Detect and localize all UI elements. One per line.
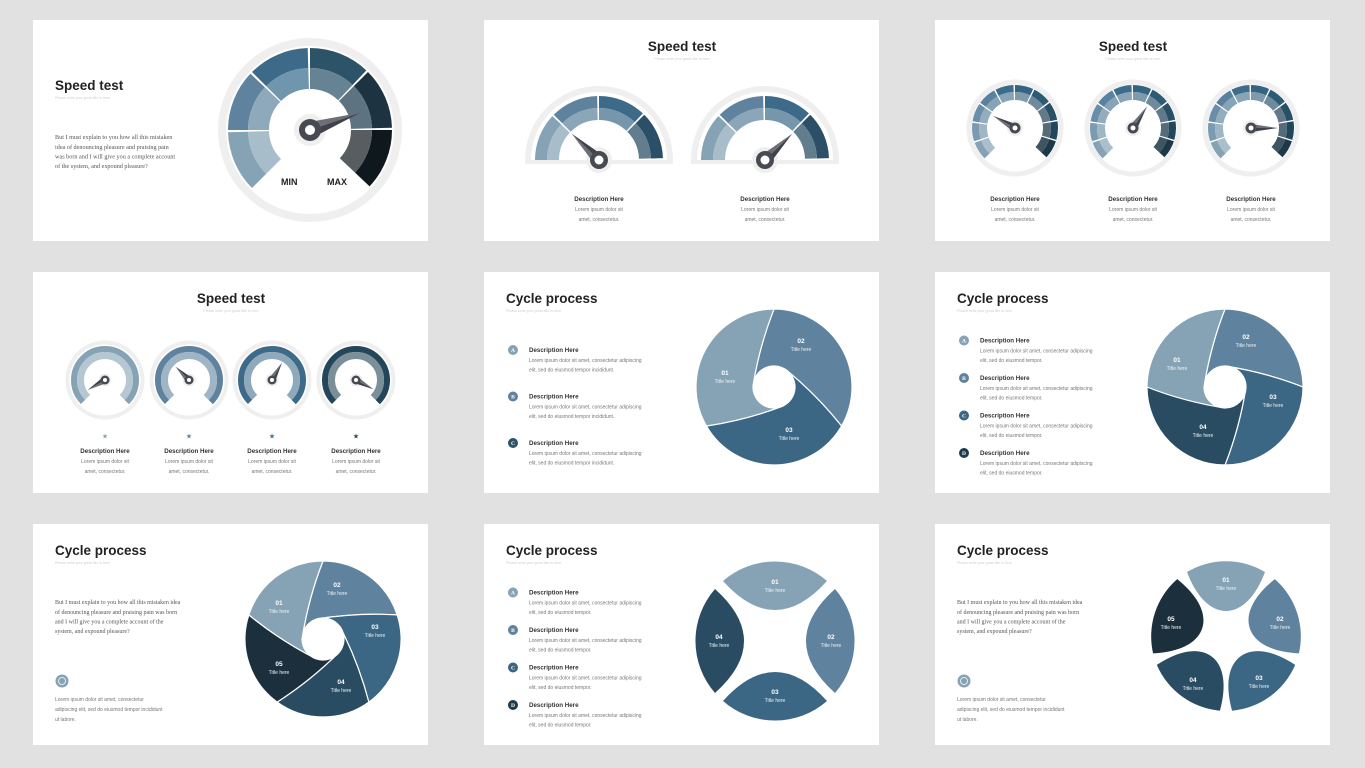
slide 6: cycle process 4 bbox=[935, 272, 1330, 493]
stars and descriptions bbox=[80, 432, 381, 475]
swirl chart 3: 02 bbox=[797, 338, 805, 345]
list: Lorem ipsum dolor sit amet, consectetur adipiscing bbox=[529, 451, 642, 457]
petal chart 5: Title here bbox=[1161, 625, 1182, 631]
slide 2: two half gauges bbox=[484, 20, 879, 242]
lorem text bbox=[957, 697, 1065, 723]
subtitle: Please write your great title is here bbox=[55, 96, 110, 100]
list: Description Here bbox=[980, 450, 1030, 457]
list: Lorem ipsum dolor sit amet, consectetur adipiscing bbox=[529, 404, 642, 410]
list: Description Here bbox=[529, 394, 579, 400]
swirl chart 3 bbox=[667, 300, 852, 494]
title: Cycle process bbox=[957, 543, 1049, 558]
list: elit, sed do eiusmod tempor. bbox=[529, 610, 592, 616]
gauge 3 bbox=[228, 336, 316, 424]
slide 4: four simple gauges bbox=[33, 272, 428, 493]
petal chart 4: Title here bbox=[821, 643, 842, 649]
list: elit, sed do eiusmod tempor. bbox=[529, 648, 592, 654]
slide 5: cycle process 3 bbox=[484, 272, 879, 494]
list: elit, sed do eiusmod tempor. bbox=[529, 685, 592, 691]
slide 8: cycle process 4 petals bbox=[484, 524, 879, 745]
lorem text: Lorem ipsum dolor sit amet, consectetur bbox=[55, 697, 144, 703]
paragraph: But I must explain to you how all this mistaken idea bbox=[957, 600, 1083, 606]
list: Description Here bbox=[529, 627, 579, 634]
description left: Lorem ipsum dolor sit bbox=[575, 207, 624, 213]
petal chart 5: Title here bbox=[1216, 586, 1237, 592]
list: Lorem ipsum dolor sit amet, consectetur adipiscing bbox=[980, 386, 1093, 392]
stars and descriptions: Lorem ipsum dolor sit bbox=[165, 459, 214, 465]
list: elit, sed do eiusmod tempor. bbox=[980, 358, 1043, 364]
list: elit, sed do eiusmod tempor. bbox=[980, 396, 1043, 402]
descriptions: amet, consectetur. bbox=[995, 217, 1035, 223]
swirl chart 5: 02 bbox=[333, 582, 341, 589]
swirl chart 5: Title here bbox=[327, 591, 348, 597]
swirl chart 4: Title here bbox=[1167, 366, 1188, 372]
stars and descriptions: ★ bbox=[186, 432, 192, 440]
petal chart 5: 01 bbox=[1222, 577, 1230, 584]
swirl chart 4 bbox=[1147, 309, 1303, 465]
paragraph bbox=[55, 600, 181, 635]
list: elit, sed do eiusmod tempor. bbox=[980, 470, 1043, 476]
gauge 2 bbox=[145, 336, 233, 424]
subtitle: Please write your great title is here bbox=[1105, 57, 1161, 61]
gauge 1 bbox=[61, 336, 149, 424]
list: elit, sed do eiusmod tempor. bbox=[980, 433, 1043, 439]
petal chart 5 bbox=[1143, 561, 1309, 719]
list: Description Here bbox=[529, 440, 579, 447]
lorem text: adipiscing elit, sed do eiusmod tempor incididunt bbox=[55, 707, 163, 713]
list: A bbox=[511, 348, 515, 354]
list: Description Here bbox=[980, 375, 1030, 382]
list: C bbox=[511, 666, 515, 672]
gauge 3 bbox=[1195, 72, 1307, 184]
petal chart 4: Title here bbox=[765, 698, 786, 704]
descriptions: Description Here bbox=[1108, 196, 1158, 203]
list: D bbox=[511, 703, 515, 709]
icon: info circle bbox=[56, 674, 68, 688]
petal chart 5: Title here bbox=[1270, 625, 1291, 631]
petal chart 4: 02 bbox=[827, 634, 835, 641]
descriptions: Lorem ipsum dolor sit bbox=[1227, 207, 1276, 213]
gauge: large bbox=[208, 28, 412, 232]
swirl chart 5 bbox=[217, 544, 420, 746]
title: Speed test bbox=[1099, 39, 1168, 54]
list: elit, sed do eiusmod tempor. bbox=[529, 722, 592, 728]
title: Cycle process bbox=[506, 543, 598, 558]
stars and descriptions: amet, consectetur. bbox=[85, 469, 125, 475]
slide 9: cycle process 5 petals bbox=[935, 524, 1330, 745]
gauge: large: MAX bbox=[327, 177, 347, 187]
paragraph: idea of denouncing pleasure and praising pain bbox=[55, 144, 169, 151]
petal chart 5: 02 bbox=[1276, 616, 1284, 623]
description left bbox=[574, 196, 624, 223]
petal chart 4: 04 bbox=[715, 634, 723, 641]
list: Description Here bbox=[529, 590, 579, 596]
swirl chart 3: 03 bbox=[785, 427, 793, 434]
list: Lorem ipsum dolor sit amet, consectetur adipiscing bbox=[980, 461, 1093, 467]
swirl chart 5: 04 bbox=[337, 679, 345, 686]
list: A bbox=[962, 338, 966, 344]
description right: Description Here bbox=[740, 196, 790, 203]
stars and descriptions: amet, consectetur. bbox=[336, 469, 376, 475]
swirl chart 5: Title here bbox=[269, 609, 290, 615]
swirl chart 3: Title here bbox=[715, 379, 736, 385]
swirl chart 4: 01 bbox=[1173, 357, 1181, 364]
paragraph: system, and expound pleasure? bbox=[55, 629, 130, 635]
list bbox=[508, 588, 642, 728]
swirl chart 3: Title here bbox=[779, 436, 800, 442]
description left: amet, consectetur. bbox=[579, 217, 619, 223]
description right: Lorem ipsum dolor sit bbox=[741, 207, 790, 213]
gauge: large: MIN bbox=[281, 177, 298, 187]
list: Lorem ipsum dolor sit amet, consectetur adipiscing bbox=[529, 600, 642, 606]
stars and descriptions: ★ bbox=[102, 432, 108, 440]
list: C bbox=[511, 441, 515, 447]
paragraph: system, and expound pleasure? bbox=[957, 629, 1032, 635]
swirl chart 4: Title here bbox=[1193, 433, 1214, 439]
descriptions: Description Here bbox=[1226, 196, 1276, 203]
swirl chart 4: 03 bbox=[1269, 394, 1277, 401]
descriptions: amet, consectetur. bbox=[1231, 217, 1271, 223]
stars and descriptions: ★ bbox=[353, 432, 359, 440]
stars and descriptions: Description Here bbox=[80, 448, 130, 455]
slide 3: three segmented gauges bbox=[935, 20, 1330, 241]
lorem text: adipiscing elit, sed do eiusmod tempor incididunt bbox=[957, 707, 1065, 713]
paragraph: of denouncing pleasure and praising pain was born bbox=[55, 609, 177, 616]
list: elit, sed do eiusmod tempor incididunt. bbox=[529, 368, 614, 374]
swirl chart 5: 01 bbox=[275, 600, 283, 607]
petal chart 5: Title here bbox=[1249, 684, 1270, 690]
swirl chart 5: Title here bbox=[365, 633, 386, 639]
swirl chart 5: 05 bbox=[275, 661, 283, 668]
subtitle: Please write your great title is here bbox=[654, 57, 710, 61]
list: D bbox=[962, 451, 966, 457]
title: Speed test bbox=[648, 39, 717, 54]
stars and descriptions: Lorem ipsum dolor sit bbox=[332, 459, 381, 465]
subtitle: Please write your great title is here bbox=[957, 309, 1012, 313]
descriptions: Description Here bbox=[990, 196, 1040, 203]
petal chart 5: 05 bbox=[1167, 616, 1175, 623]
swirl chart 5: 03 bbox=[371, 624, 379, 631]
stars and descriptions: Description Here bbox=[164, 448, 214, 455]
description left: Description Here bbox=[574, 196, 624, 203]
list bbox=[959, 336, 1093, 476]
list: B bbox=[962, 376, 966, 382]
paragraph: and I will give you a complete account of the bbox=[55, 618, 164, 626]
stars and descriptions: Lorem ipsum dolor sit bbox=[81, 459, 130, 465]
paragraph bbox=[55, 134, 175, 170]
descriptions: amet, consectetur. bbox=[1113, 217, 1153, 223]
petal chart 5: 04 bbox=[1189, 677, 1197, 684]
list: Description Here bbox=[980, 412, 1030, 420]
gauge 1 bbox=[959, 72, 1071, 184]
list: Lorem ipsum dolor sit amet, consectetur adipiscing bbox=[980, 348, 1093, 354]
lorem text: ut labore. bbox=[55, 717, 76, 723]
swirl chart 5: Title here bbox=[331, 688, 352, 694]
stars and descriptions: Description Here bbox=[331, 448, 381, 455]
title: Speed test bbox=[55, 78, 124, 93]
gauge: half left bbox=[517, 78, 681, 242]
gauge: half right bbox=[683, 78, 847, 242]
list: Description Here bbox=[529, 664, 579, 672]
list: Lorem ipsum dolor sit amet, consectetur adipiscing bbox=[980, 424, 1093, 430]
petal chart 4 bbox=[695, 561, 855, 721]
gauge 4 bbox=[312, 336, 400, 424]
description right bbox=[740, 196, 790, 223]
list: C bbox=[962, 414, 966, 420]
petal chart 4: Title here bbox=[765, 588, 786, 594]
lorem text: ut labore. bbox=[957, 717, 978, 723]
subtitle: Please write your great title is here bbox=[957, 561, 1012, 565]
swirl chart 3: 01 bbox=[721, 370, 729, 377]
gauge 2 bbox=[1077, 72, 1189, 184]
description right: amet, consectetur. bbox=[745, 217, 785, 223]
list: Description Here bbox=[529, 347, 579, 354]
subtitle: Please write your great title is here bbox=[55, 561, 110, 565]
list: A bbox=[511, 590, 515, 596]
descriptions: Lorem ipsum dolor sit bbox=[1109, 207, 1158, 213]
list: Description Here bbox=[529, 702, 579, 709]
list: Lorem ipsum dolor sit amet, consectetur adipiscing bbox=[529, 358, 642, 364]
descriptions bbox=[990, 196, 1276, 223]
paragraph: But I must explain to you how all this mistaken idea bbox=[55, 600, 181, 606]
stars and descriptions: Description Here bbox=[247, 448, 297, 455]
list: Description Here bbox=[980, 338, 1030, 344]
swirl chart 5: Title here bbox=[269, 670, 290, 676]
stars and descriptions: Lorem ipsum dolor sit bbox=[248, 459, 297, 465]
petal chart 4: 03 bbox=[771, 689, 779, 696]
swirl chart 4: 04 bbox=[1199, 424, 1207, 431]
descriptions: Lorem ipsum dolor sit bbox=[991, 207, 1040, 213]
petal chart 4: Title here bbox=[709, 643, 730, 649]
subtitle: Please write your great title is here bbox=[203, 309, 259, 313]
title: Cycle process bbox=[55, 543, 147, 558]
slide 7: cycle process 5 swirl bbox=[33, 524, 428, 746]
stars and descriptions: amet, consectetur. bbox=[252, 469, 292, 475]
list: Lorem ipsum dolor sit amet, consectetur adipiscing bbox=[529, 638, 642, 644]
list: elit, sed do eiusmod tempor incididunt. bbox=[529, 414, 614, 420]
subtitle: Please write your great title is here bbox=[506, 561, 561, 565]
petal chart 5: 03 bbox=[1255, 675, 1263, 682]
lorem text: Lorem ipsum dolor sit amet, consectetur bbox=[957, 697, 1046, 703]
paragraph bbox=[957, 600, 1083, 635]
swirl chart 4: Title here bbox=[1263, 403, 1284, 409]
list: Lorem ipsum dolor sit amet, consectetur adipiscing bbox=[529, 676, 642, 682]
paragraph: was born and I will give you a complete account bbox=[55, 154, 175, 160]
paragraph: of the system, and expound pleasure? bbox=[55, 163, 148, 170]
list: Lorem ipsum dolor sit amet, consectetur adipiscing bbox=[529, 713, 642, 719]
subtitle: Please write your great title is here bbox=[506, 309, 561, 313]
stars and descriptions: ★ bbox=[269, 432, 275, 440]
icon: info circle bbox=[958, 674, 970, 688]
lorem text bbox=[55, 697, 163, 723]
swirl chart 3: Title here bbox=[791, 347, 812, 353]
title: Cycle process bbox=[957, 291, 1049, 306]
slide 1: speed test single gauge bbox=[33, 20, 428, 241]
petal chart 4: 01 bbox=[771, 579, 779, 586]
paragraph: But I must explain to you how all this mistaken bbox=[55, 134, 172, 141]
stars and descriptions: amet, consectetur. bbox=[169, 469, 209, 475]
swirl chart 4: Title here bbox=[1236, 343, 1257, 349]
paragraph: of denouncing pleasure and praising pain was born bbox=[957, 609, 1079, 616]
title: Speed test bbox=[197, 291, 266, 306]
petal chart 5: Title here bbox=[1183, 686, 1204, 692]
list bbox=[508, 345, 642, 466]
paragraph: and I will give you a complete account of the bbox=[957, 618, 1066, 626]
list: B bbox=[511, 628, 515, 634]
title: Cycle process bbox=[506, 291, 598, 306]
list: elit, sed do eiusmod tempor incididunt. bbox=[529, 460, 614, 466]
swirl chart 4: 02 bbox=[1242, 334, 1250, 341]
list: B bbox=[511, 394, 515, 400]
